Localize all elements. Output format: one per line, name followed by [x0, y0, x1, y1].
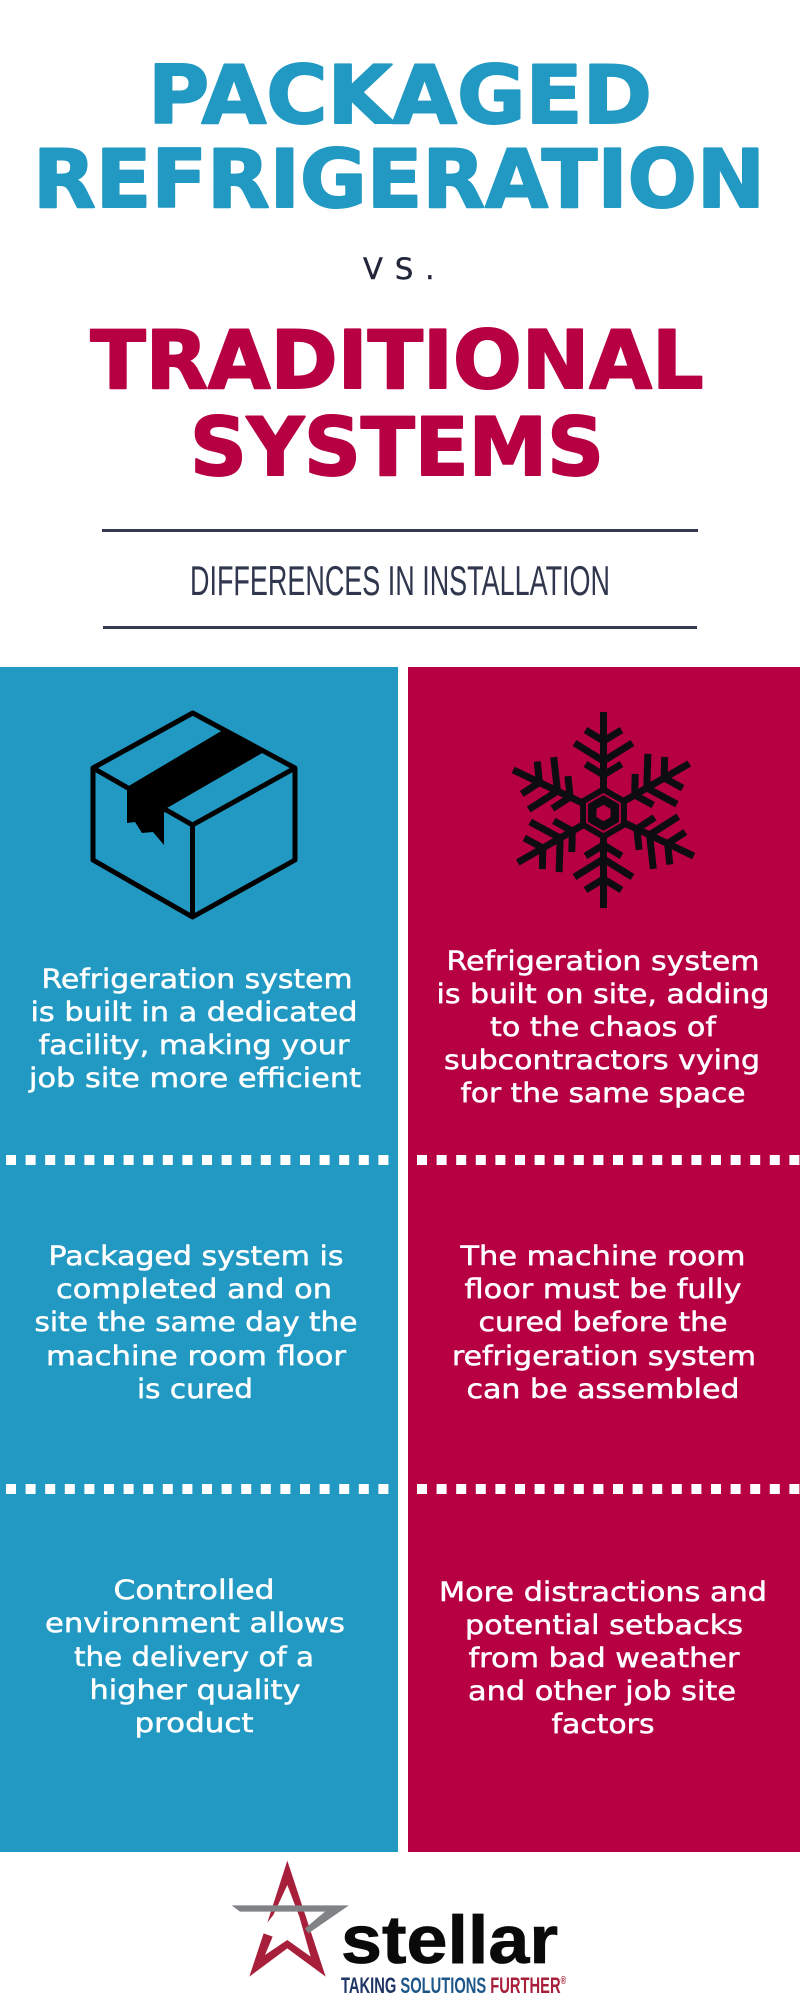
text: packaged point 1: job site more efficient	[28, 1063, 361, 1094]
text: packaged point 2: Packaged system is	[48, 1241, 344, 1272]
text: packaged point 3: environment allows	[45, 1608, 345, 1639]
logo tagline: ®	[561, 1975, 566, 1987]
title: traditional systems: TRADITIONAL	[90, 314, 704, 407]
title: traditional systems: SYSTEMS	[190, 401, 604, 494]
text: traditional point 1: is built on site, adding	[436, 979, 770, 1010]
text: traditional point 3	[439, 1577, 767, 1740]
text: packaged point 2: site the same day the	[34, 1307, 358, 1338]
text: packaged point 1	[28, 964, 361, 1094]
text: packaged point 2	[34, 1241, 358, 1405]
text: traditional point 1	[436, 946, 770, 1109]
text: packaged point 3: product	[134, 1708, 254, 1739]
text: traditional point 3: More distractions and	[439, 1577, 767, 1608]
text: traditional point 2: The machine room	[459, 1241, 746, 1272]
text: traditional point 2: refrigeration system	[452, 1341, 756, 1372]
text: packaged point 2: is cured	[137, 1374, 253, 1405]
logo tagline: TAKING SOLUTIONS FURTHER	[341, 1973, 595, 1998]
logo wordmark: stellar	[341, 1902, 558, 1978]
text: traditional point 2: cured before the	[478, 1307, 728, 1338]
text: traditional point 2	[452, 1241, 756, 1405]
text: traditional point 3: potential setbacks	[465, 1610, 743, 1641]
text: packaged point 2: completed and on	[56, 1274, 332, 1305]
text: traditional point 1: for the same space	[460, 1078, 746, 1109]
text: traditional point 1: Refrigeration system	[446, 946, 760, 977]
text: packaged point 2: machine room floor	[46, 1341, 347, 1372]
text: traditional point 2: can be assembled	[466, 1374, 740, 1405]
text: traditional point 3: and other job site	[468, 1676, 736, 1707]
text: packaged point 3: the delivery of a	[74, 1642, 314, 1673]
text: traditional point 3: from bad weather	[468, 1643, 740, 1674]
versus label: VS.	[363, 252, 446, 286]
text: packaged point 1: facility, making your	[38, 1030, 350, 1061]
icon: cardboard box	[93, 713, 295, 917]
icon: star	[232, 1861, 349, 1977]
title: packaged refrigeration	[33, 49, 765, 226]
text: traditional point 2: floor must be fully	[464, 1274, 742, 1305]
text: packaged point 3: higher quality	[90, 1675, 301, 1706]
title: traditional systems	[90, 314, 704, 494]
title: packaged refrigeration: PACKAGED	[148, 49, 652, 142]
text: packaged point 1: Refrigeration system	[42, 964, 352, 995]
title: packaged refrigeration: REFRIGERATION	[33, 133, 765, 226]
logo: stellar	[232, 1861, 566, 1998]
text: traditional point 1: to the chaos of	[490, 1012, 718, 1043]
icon: snowflake	[501, 712, 706, 908]
text: packaged point 1: is built in a dedicated	[30, 997, 358, 1028]
panel: packaged column	[0, 667, 398, 1852]
text: packaged point 3	[45, 1575, 345, 1739]
text: packaged point 3: Controlled	[114, 1575, 274, 1606]
text: traditional point 1: subcontractors vying	[444, 1045, 760, 1076]
panel: traditional column	[408, 667, 800, 1852]
text: traditional point 3: factors	[552, 1709, 654, 1740]
